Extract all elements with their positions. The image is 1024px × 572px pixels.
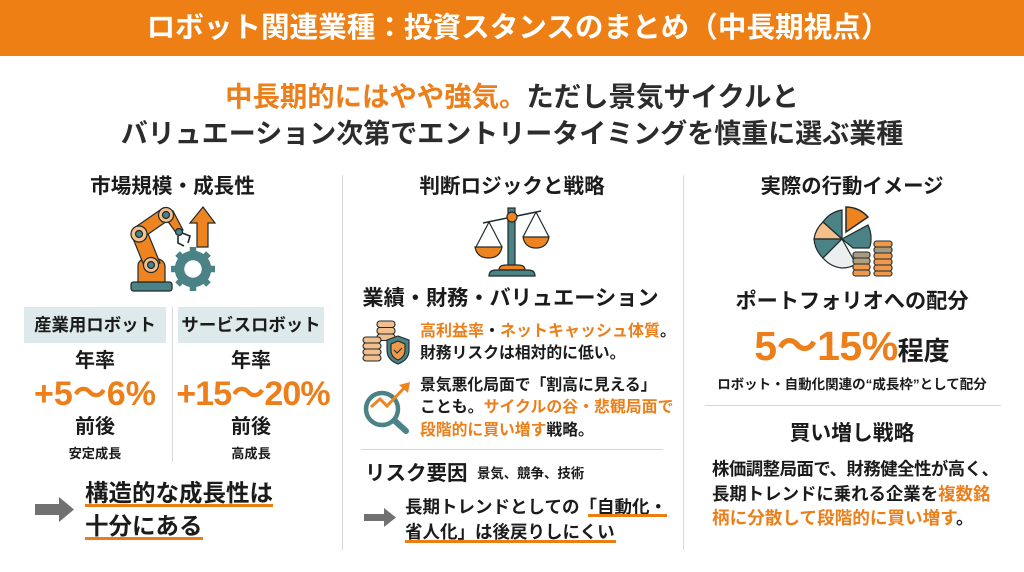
heading: performance and valuation: 業績・財務・バリュエーション bbox=[362, 287, 659, 310]
stat: allocation percentage: 5〜15%程度 bbox=[754, 323, 950, 369]
conclusion text: 十分にある bbox=[85, 513, 202, 539]
divider bbox=[361, 449, 663, 450]
stat: industrial robot growth: +5〜6% bbox=[34, 375, 156, 413]
arrow bbox=[35, 497, 74, 522]
text: cyclical buying strategy: ことも。サイクルの谷・悲観局面で bbox=[420, 399, 673, 416]
stat: industrial robot growth: 前後 bbox=[75, 416, 115, 438]
risk factors heading: 景気、競争、技術 bbox=[477, 466, 584, 481]
text: buying strategy bbox=[712, 459, 998, 528]
icon: pie chart and coins bbox=[813, 206, 893, 276]
icon: coins and shield bbox=[362, 320, 410, 365]
label: industrial robots: 産業用ロボット bbox=[34, 315, 156, 335]
conclusion text: 長期トレンドとしての「自動化・ bbox=[405, 497, 667, 517]
risk factors heading: リスク要因 bbox=[365, 462, 468, 485]
label: service robots bbox=[178, 307, 324, 343]
label: service robots: サービスロボット bbox=[181, 315, 321, 335]
divider bbox=[172, 307, 173, 462]
text: financial strength: 高利益率・ネットキャッシュ体質。 bbox=[420, 323, 676, 340]
headline: バリュエーション次第でエントリータイミングを慎重に選ぶ業種 bbox=[121, 119, 903, 149]
risk factors heading bbox=[365, 462, 584, 485]
conclusion text: 構造的な成長性は bbox=[85, 480, 273, 506]
headline bbox=[121, 81, 903, 149]
heading: market size: 市場規模・成長性 bbox=[90, 175, 255, 198]
heading: additional buying strategy: 買い増し戦略 bbox=[790, 422, 914, 445]
stat: service robot growth: +15〜20% bbox=[176, 375, 330, 413]
text: financial strength: 財務リスクは相対的に低い。 bbox=[420, 345, 625, 362]
panel: practical action bbox=[705, 175, 1001, 528]
stat: industrial robot growth: 年率 bbox=[75, 350, 115, 372]
stat: service robot growth bbox=[176, 350, 330, 461]
text: buying strategy: 長期トレンドに乗れる企業を複数銘 bbox=[712, 484, 990, 504]
stat: service robot growth: 前後 bbox=[231, 416, 271, 438]
text: buying strategy: 株価調整局面で、財務健全性が高く、 bbox=[712, 459, 998, 479]
text: cyclical buying strategy: 景気悪化局面で「割高に見える」 bbox=[420, 377, 656, 394]
icon: robot arm with gear and arrow bbox=[130, 206, 216, 292]
title banner bbox=[0, 0, 1024, 56]
headline: 中長期的にはやや強気。ただし景気サイクルと bbox=[225, 81, 799, 112]
heading: logic: 判断ロジックと戦略 bbox=[419, 175, 605, 198]
conclusion text bbox=[85, 480, 273, 540]
arrow bbox=[364, 508, 396, 527]
stat: service robot growth: 高成長 bbox=[231, 446, 271, 461]
text: cyclical buying strategy bbox=[420, 376, 673, 439]
note: growth allocation: ロボット・自動化関連の“成長枠”として配分 bbox=[717, 377, 987, 392]
icon: magnifier with rising chart bbox=[364, 382, 410, 434]
icon: balance scale bbox=[474, 207, 550, 277]
heading: portfolio allocation: ポートフォリオへの配分 bbox=[735, 290, 969, 313]
text: buying strategy: 柄に分散して段階的に買い増す。 bbox=[712, 508, 974, 528]
panel: decision logic and strategy bbox=[361, 175, 676, 543]
divider lines bbox=[342, 175, 343, 550]
stat: industrial robot growth bbox=[34, 350, 156, 461]
text: financial strength bbox=[420, 322, 676, 362]
heading: action image: 実際の行動イメージ bbox=[760, 176, 944, 198]
conclusion text: 省人化」は後戻りしにくい bbox=[405, 522, 615, 542]
divider bbox=[705, 405, 1001, 406]
label: industrial robots bbox=[24, 307, 166, 343]
title banner: ロボット関連業種：投資スタンスのまとめ（中長期視点） bbox=[147, 12, 889, 44]
panel: market size and growth bbox=[24, 175, 330, 540]
text: cyclical buying strategy: 段階的に買い増す戦略。 bbox=[420, 422, 594, 439]
stat: service robot growth: 年率 bbox=[231, 350, 271, 372]
stat: industrial robot growth: 安定成長 bbox=[69, 446, 121, 461]
conclusion text bbox=[405, 497, 667, 543]
